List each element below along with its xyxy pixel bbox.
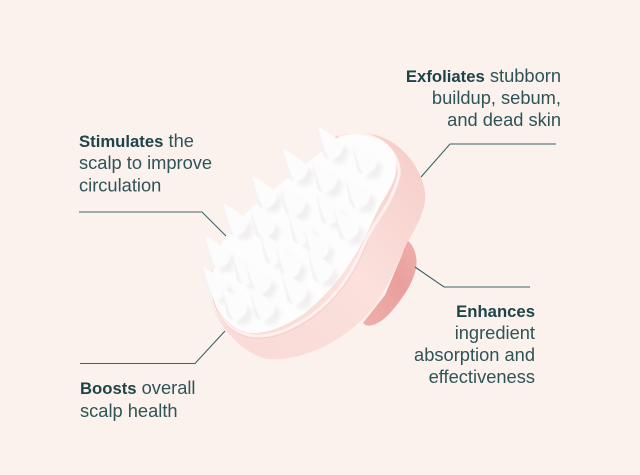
- thin rim line: [212, 241, 368, 338]
- text: enhances: effectiveness: [429, 366, 535, 387]
- text: boosts: [80, 377, 196, 421]
- text: boosts: scalp health: [80, 400, 178, 421]
- text: exfoliates: [406, 65, 561, 130]
- leader line: exfoliates: [421, 144, 556, 177]
- leader line: boosts: [80, 331, 225, 364]
- text: stimulates: Stimulates the: [79, 130, 194, 151]
- text: exfoliates: Exfoliates stubborn: [406, 65, 561, 86]
- handle knob: [363, 240, 417, 326]
- second row spikes: [352, 142, 383, 179]
- body rim: [211, 133, 399, 336]
- text: enhances: absorption and: [414, 344, 535, 365]
- text: stimulates: circulation: [79, 174, 161, 196]
- text: enhances: Enhances: [456, 302, 535, 321]
- back row spikes: [318, 127, 349, 164]
- text: stimulates: scalp to improve: [79, 152, 212, 173]
- text: exfoliates: and dead skin: [447, 109, 561, 130]
- fourth row spikes: [334, 208, 365, 245]
- leader line: stimulates: [79, 212, 226, 236]
- brush body: [209, 132, 425, 359]
- white bristle pad: [212, 134, 396, 333]
- text: exfoliates: buildup, sebum,: [432, 87, 561, 108]
- front row spikes: [308, 250, 339, 287]
- text: stimulates: [79, 130, 212, 196]
- third row spikes: [345, 176, 376, 213]
- leader line: enhances: [415, 267, 530, 287]
- bristles: [203, 127, 383, 325]
- text: enhances: [414, 302, 535, 387]
- text: enhances: ingredient: [455, 322, 535, 343]
- text: boosts: Boosts overall: [80, 377, 196, 398]
- product: scalp massager brush: [203, 127, 425, 359]
